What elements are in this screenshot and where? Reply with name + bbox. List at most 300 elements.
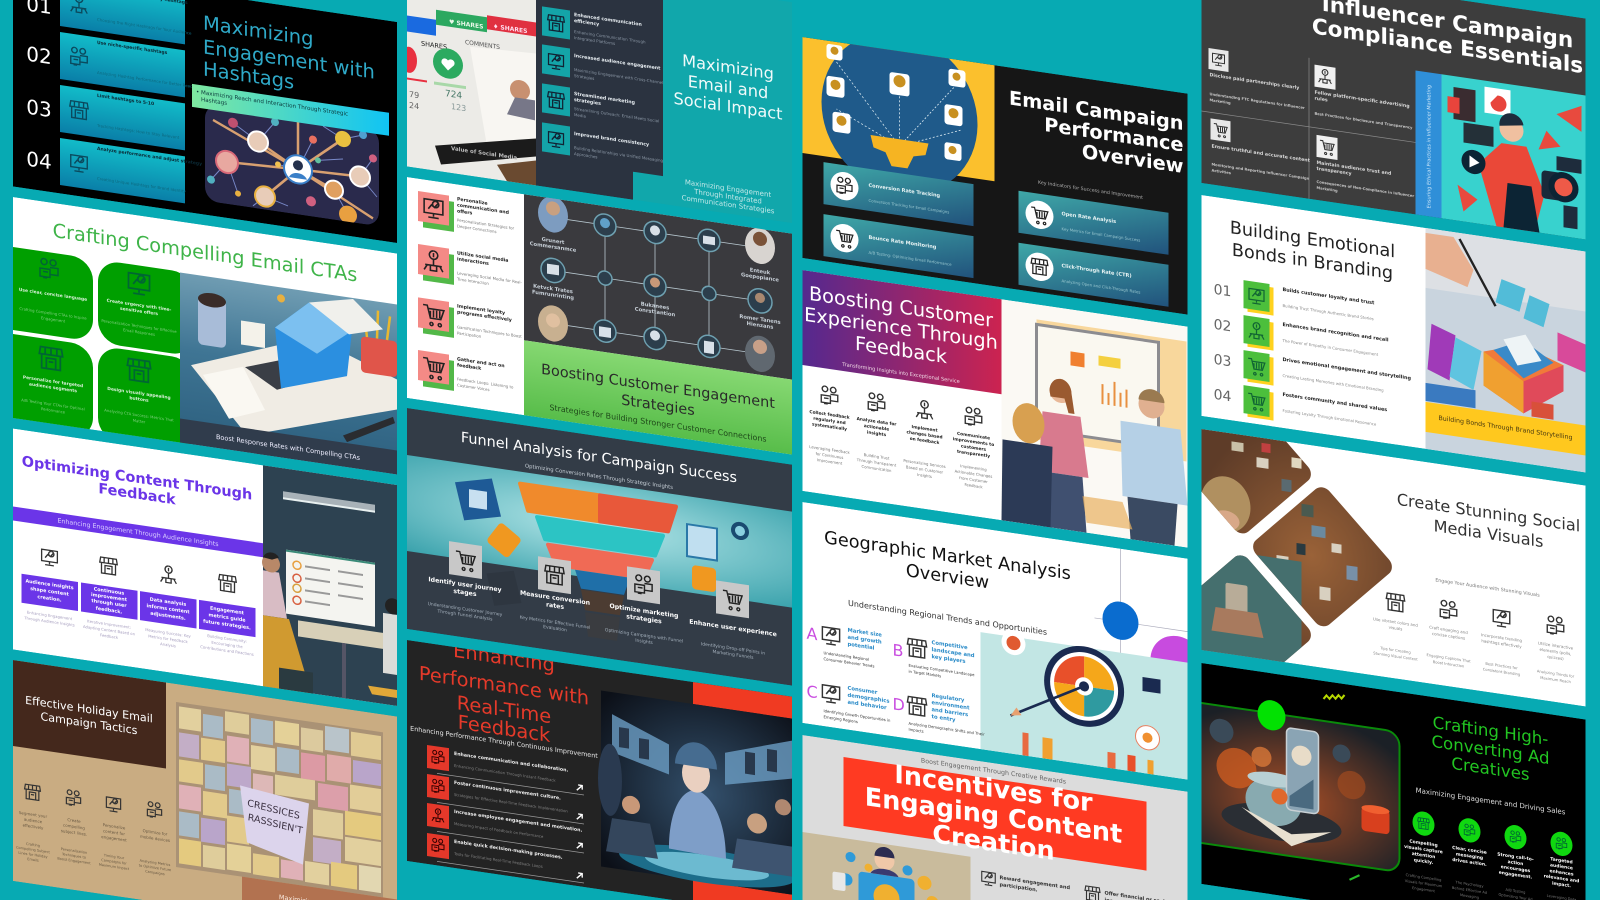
footer caption: Boost Response Rates with Compelling CTAs — [216, 433, 361, 462]
column 2: Adapting Content Based on — [83, 624, 136, 637]
step 01 — [26, 0, 192, 45]
column 1: for Continuous — [816, 451, 843, 460]
creator illustration — [802, 832, 970, 900]
card: buttons — [98, 348, 190, 444]
column 2: compelling — [63, 822, 85, 831]
item reward — [982, 871, 1070, 898]
row 02: Enhances brand recognition and recall — [1282, 322, 1389, 344]
step 03: 03 — [26, 95, 52, 122]
network diagram: Fumrunrinting — [532, 289, 574, 302]
slide: Boosting Customer Engagement Strategies — [407, 175, 792, 455]
red title block: Incentives for — [894, 760, 1093, 819]
item platform: Best Practices for Disclosure and Transparency — [1314, 112, 1413, 130]
column 2: subject lines. — [61, 828, 87, 837]
column 4: Encouraging the — [211, 640, 243, 649]
item platform: Follow platform-specific advertising — [1314, 90, 1410, 110]
slide: Optimizing Content Through Feedback — [13, 428, 401, 707]
footer caption — [242, 877, 397, 900]
item 4: Improved brand consistency — [574, 131, 649, 148]
title block: Effective Holiday Email — [25, 694, 153, 726]
item D: environment — [932, 700, 970, 712]
item 1: Enhance communication and collaboration. — [454, 751, 568, 774]
column 1: Use vibrant colors and — [1373, 616, 1418, 628]
item 1: efficiency — [574, 18, 599, 28]
card: personalize — [13, 334, 93, 430]
step 1: Through Funnel Analysis — [437, 608, 493, 623]
column 2: through user — [91, 598, 127, 609]
item 2: Time Interaction — [456, 276, 489, 286]
item C: demographics — [848, 693, 890, 705]
column 4: Contributions and Reactions — [200, 644, 254, 657]
column 2: actionable — [864, 423, 889, 433]
item 4 — [418, 350, 514, 400]
column 2 — [57, 788, 91, 865]
row 03 — [1214, 346, 1411, 406]
column 3: Metrics for Feedback — [148, 633, 189, 644]
vertical strip — [1416, 70, 1442, 218]
card: bounce: Bounce Rate Monitoring — [868, 235, 937, 251]
column 3: Maximum Impact — [99, 863, 130, 871]
item C: Identifying Growth Opportunities in — [824, 708, 891, 723]
title: Geographic Market Analysis — [824, 527, 1071, 584]
subtitle: Optimizing Conversion Rates Through Strategic Insights — [525, 463, 673, 491]
column 3: informs content — [146, 603, 190, 616]
column 2 — [81, 554, 138, 643]
column 4 — [953, 405, 994, 491]
green caption — [524, 340, 792, 455]
item A: Consumer Behavior Trends — [824, 656, 874, 669]
column 2: improvement — [91, 592, 128, 603]
item 3: Media — [574, 112, 587, 119]
column 4: metrics guide — [208, 612, 246, 624]
column 2: Analyze data for — [857, 416, 897, 428]
network diagram: Commersanmce — [530, 241, 577, 254]
column 2: Clear, concise — [1452, 845, 1487, 856]
card: open rate: Open Rate Analysis — [1062, 211, 1116, 225]
row 01: Builds customer loyalty and trust — [1282, 287, 1375, 306]
item 4: Tools for Facilitating Real-Time Feedback Loops — [453, 851, 543, 869]
column 2 — [1452, 816, 1487, 900]
network diagram: Conrsttantion — [635, 307, 675, 318]
step 2: Key Metrics for Effective Funnel — [520, 615, 590, 631]
sticky notes image: CRESSICES — [247, 798, 300, 822]
column 1: Improvement — [817, 457, 843, 466]
item 2: Maximizing Engagement with Cross-Channel — [574, 67, 663, 85]
item trust: transparency — [1316, 166, 1352, 177]
item 3: programs effectively — [457, 309, 512, 323]
column 3: Implement — [911, 424, 938, 434]
item 1: Deeper Connections — [457, 223, 496, 234]
phone image: 24 — [409, 101, 419, 111]
network diagram: Enteuk — [750, 267, 771, 276]
subtitle: Understanding Regional Trends and Opportunities — [848, 599, 1047, 637]
title: Real-Time — [457, 691, 551, 728]
title: Email and — [688, 72, 768, 103]
column 3: Insights — [917, 472, 932, 479]
item C: C — [806, 682, 818, 702]
column 4: Targeted — [1550, 856, 1573, 866]
column 4: elements (polls, — [1540, 647, 1571, 656]
column 2: Behind Effective Ad — [1452, 886, 1487, 895]
column 3 — [1481, 608, 1523, 677]
title: Converting Ad — [1431, 732, 1550, 768]
funnel — [520, 484, 676, 650]
slide: Funnel Analysis for Campaign Success — [407, 408, 792, 686]
item 3: Participation — [457, 330, 482, 339]
column 4: Campaigns — [145, 869, 165, 876]
slide: Geographic Market Analysis Overview — [802, 502, 1204, 782]
column 3: Personalize — [103, 822, 126, 831]
item 2: Foster continuous improvement culture. — [454, 780, 561, 802]
column 1: visuals — [1389, 625, 1402, 632]
item 3 — [542, 83, 659, 122]
office image — [262, 465, 401, 707]
branding image — [1426, 228, 1586, 472]
green caption: Strategies — [621, 393, 695, 419]
card: personalize: audience segments — [29, 381, 77, 394]
column 3: engagement. — [1499, 870, 1533, 881]
phone image — [401, 0, 536, 185]
column 4: Building Community: — [207, 633, 247, 644]
item trust: Consequences of Non-Compliance in Influencer — [1316, 180, 1414, 198]
slide: Incentives for Engaging Content Creation — [802, 735, 1188, 900]
column 1 — [1404, 809, 1443, 894]
item 1: Enhancing Communication Through — [574, 29, 646, 45]
column 1: audience — [24, 817, 43, 824]
step 1 — [428, 538, 503, 624]
card: CTR: Click-Through Rate (CTR) — [1062, 263, 1132, 279]
item 2: Leveraging Social Media for Real- — [457, 270, 522, 285]
title block — [13, 660, 166, 768]
title: Feedback — [458, 711, 551, 747]
item disclose — [1208, 48, 1305, 116]
diamond photo collage — [1200, 429, 1402, 679]
green circle — [1258, 698, 1286, 732]
column 1: Crafting — [26, 842, 40, 848]
item 1: offers — [457, 208, 473, 217]
item 4: Gather and act on — [457, 356, 505, 369]
phone image: 123 — [451, 102, 466, 113]
title: Compliance Essentials — [1312, 14, 1583, 79]
card: buttons: buttons — [129, 395, 149, 404]
slide: Create Stunning Social Media Visuals — [1200, 429, 1586, 706]
column 3: encourages — [1501, 864, 1530, 874]
subtitle: Maximizing Engagement — [685, 177, 771, 199]
title: Enhancing — [453, 639, 555, 677]
subtitle bar: Enhancing Engagement Through Audience Insights — [57, 518, 219, 548]
column 2: insights — [867, 429, 887, 438]
item B: landscape and — [932, 647, 975, 659]
column 1: systematically — [812, 421, 847, 433]
column 2: Building Trust — [864, 452, 890, 461]
item B: B — [892, 640, 903, 661]
column 2: Craft engaging and — [1429, 624, 1468, 635]
row 01: Building Trust Through Authentic Brand Stories — [1282, 303, 1374, 321]
title: Performance — [1044, 113, 1183, 156]
card: buttons: Analyzing CTA Success: Metrics That — [104, 407, 174, 423]
column 1: Engagement — [1412, 886, 1436, 893]
slide: Building Emotional Bonds in Branding — [1202, 195, 1586, 472]
subtitle bar — [13, 506, 263, 557]
card: urgency: Create urgency with time- — [107, 298, 171, 313]
step 3 — [605, 563, 683, 651]
card: urgency: Email Responses — [123, 327, 155, 337]
sticky notes image: RASSSIEN'T — [247, 812, 303, 837]
column 1 — [16, 783, 50, 865]
phone image: COMMENTS — [465, 39, 500, 51]
item 3: strategies — [574, 97, 601, 107]
column 1: Segment your — [19, 810, 47, 819]
scene image — [1182, 700, 1400, 872]
item offer — [1085, 886, 1170, 900]
item D: to entry — [932, 714, 956, 724]
slide: Crafting High-Converting Ad Creatives — [1182, 660, 1586, 900]
column 3: Timing Your — [103, 853, 125, 860]
column 1: Lines for Holiday — [18, 851, 48, 859]
item disclose: Understanding FTC Regulations for Influencer — [1210, 92, 1305, 110]
title: Building Emotional — [1230, 218, 1395, 262]
column 4 — [1537, 614, 1575, 685]
row 02 — [1214, 311, 1389, 368]
card: clear language: Crafting Compelling CTAs to Inspire — [19, 306, 87, 321]
column 4: Actionable Changes — [955, 468, 992, 479]
column 3: Based on Customer — [906, 464, 944, 475]
item 4: Feedback Loops: Listening to — [457, 376, 514, 390]
step 3: Optimize marketing — [609, 603, 679, 620]
item D: Analyzing Demographic Shifts and Their — [908, 721, 985, 737]
column 3: Strong call-to- — [1497, 852, 1534, 863]
column 1 — [22, 546, 78, 628]
item 3: Streamlining Outreach: Email Meets Social — [574, 106, 659, 124]
column 3: on feedback — [910, 436, 939, 446]
subtitle: Maximizing Engagement and Driving Sales — [1416, 786, 1566, 817]
step 4: Identifying Drop-off Points in — [701, 641, 765, 657]
item 2: Strategies for Effective Real-Time Feedback Implementation — [454, 792, 568, 814]
column 2: Techniques to — [61, 852, 86, 860]
header block: Feedback — [855, 332, 948, 368]
column 4: to Optimize Future — [139, 864, 171, 872]
red accents — [693, 682, 792, 900]
column 1: shape content — [30, 586, 69, 598]
card: open rate — [1018, 191, 1168, 255]
item truthful: Monitoring and Reporting Influencer Campaign — [1212, 162, 1310, 181]
column 1: Leveraging Feedback — [809, 444, 850, 455]
card: clear language: Use clear, concise language — [19, 287, 87, 303]
column 3: Measuring Success: Key — [145, 627, 192, 639]
column 1: effectively — [23, 822, 44, 831]
item C — [806, 680, 891, 729]
item 1: Integrated Platforms — [574, 35, 615, 46]
item D: and barriers — [932, 707, 968, 718]
item 2: interactions — [457, 256, 489, 267]
item 1: communication and — [457, 202, 509, 216]
item disclose: Marketing — [1210, 98, 1231, 105]
step 03: Tracking Hashtags: How to Stay Relevant — [96, 123, 180, 140]
column 2: Feedback — [100, 632, 119, 640]
subtitle ribbon — [192, 84, 389, 136]
column 1: Compelling — [1409, 839, 1438, 849]
card: conversion: Conversion Rate Tracking — [868, 183, 941, 199]
card: urgency — [98, 262, 180, 354]
phone image: ♦ SHARES — [493, 23, 527, 35]
card: urgency: Personalization Techniques for Effective — [101, 318, 177, 334]
item 4 — [542, 122, 663, 163]
title: Hashtags — [203, 58, 294, 94]
column 2: Communication — [862, 464, 892, 473]
item truthful — [1210, 118, 1311, 187]
item 2 — [427, 774, 584, 824]
card: personalize: Personalize for targeted — [23, 374, 83, 389]
card: open rate: Key Metrics for Email Campaign Success — [1062, 226, 1140, 243]
phone image: 724 — [445, 89, 462, 102]
step 4: Marketing Funnels — [712, 649, 754, 661]
title: Maximizing — [682, 51, 774, 83]
title: Crafting High- — [1433, 713, 1548, 749]
item B: in Target Markets — [908, 669, 941, 678]
column 2: Engaging Captions That — [1426, 653, 1471, 664]
row 02: The Power of Empathy in Consumer Engagement — [1282, 338, 1379, 357]
header block: Experience Through — [804, 303, 998, 354]
step 3: strategies — [626, 613, 662, 625]
column 1: regularly and — [813, 416, 846, 426]
item 4: Enable quick decision-making processes. — [454, 839, 563, 861]
network diagram: Grunert — [542, 237, 565, 246]
item 2: Increased audience engagement — [574, 53, 661, 72]
item B: Competitive — [932, 640, 968, 651]
row 01 — [1214, 276, 1375, 331]
step 1: Identify user journey — [428, 576, 502, 594]
step 03 — [26, 80, 185, 150]
item truthful: Ensure truthful and accurate content — [1212, 143, 1311, 164]
step 3: Optimizing Campaigns with Funnel — [605, 627, 683, 645]
item 2 — [418, 244, 522, 295]
column 1: visuals capture — [1404, 844, 1443, 855]
column 2: Messaging — [1460, 893, 1479, 900]
vertical strip: Ensuring Ethical Practices in Influencer Marketing — [1427, 84, 1432, 209]
column 3 — [99, 796, 130, 871]
item trust: Maintain audience trust and — [1316, 160, 1391, 177]
item A: Understanding Regional — [824, 650, 869, 662]
network diagram: Bukanees — [641, 301, 669, 312]
card: clear language: Engagement — [41, 315, 66, 324]
column 1: Through Audience Insights — [23, 615, 75, 628]
column 3: action — [1508, 859, 1523, 867]
row 02: 02 — [1214, 317, 1231, 335]
header block — [802, 270, 1002, 394]
slide: Influencer Campaign Compliance Essentials — [1202, 0, 1586, 239]
step 1: stages — [453, 588, 477, 598]
column 4: Analyzing Metrics — [140, 859, 171, 867]
column 2: Through Transparent — [856, 457, 897, 468]
column 4: from Customer — [959, 475, 988, 484]
item truthful: Activities — [1212, 168, 1232, 175]
step 02: Analyzing Hashtag Performance for Better Reach — [97, 70, 195, 89]
item disclose: Disclose paid partnerships clearly — [1210, 72, 1299, 91]
step 04: Analyze performance and adjust strategy — [97, 146, 202, 167]
column 3: hashtags effectively — [1481, 638, 1522, 649]
squiggle accents — [1324, 692, 1360, 881]
step 2: Evaluation — [543, 624, 567, 634]
step 2: Measure conversion — [520, 590, 590, 607]
slide: Crafting Compelling Email CTAs — [0, 194, 397, 484]
yellow caption — [1426, 402, 1586, 455]
card: personalize: A/B Testing Your CTAs for Optimal — [21, 397, 85, 412]
subtitle: Boost Engagement Through Creative Rewards — [921, 757, 1066, 786]
red title block — [844, 752, 1146, 881]
column 2: Boost Engagement — [57, 857, 91, 865]
item D: D — [892, 694, 905, 715]
column 3: Personalizing Services — [903, 458, 946, 469]
card: clear language — [13, 247, 93, 339]
item B: Evaluating Competitive Landscape — [908, 663, 975, 677]
column 1: Audience insights — [25, 578, 74, 591]
column 2: Iterative Improvement: — [87, 618, 131, 630]
influencer illustration — [1442, 74, 1586, 239]
network image — [205, 104, 379, 228]
item reward: participation. — [999, 882, 1038, 894]
column 4: mobile devices — [140, 834, 170, 843]
title: Creatives — [1451, 754, 1530, 784]
column 1: Compelling Subject — [16, 845, 50, 855]
item 4: Approaches — [574, 151, 598, 160]
step 2 — [520, 554, 590, 637]
column 4: impact. — [1552, 881, 1571, 889]
column 3: Consistent Branding — [1483, 667, 1521, 677]
item 4 — [427, 833, 584, 883]
item C: and behavior — [848, 700, 887, 711]
step 4: Enhance user experience — [689, 619, 777, 638]
column 4 — [199, 571, 256, 657]
item B: key players — [932, 654, 966, 665]
item trust: Marketing — [1316, 186, 1338, 193]
subtitle: Engage Your Audience with Stunning Visuals — [1435, 577, 1540, 599]
title block: Campaign Tactics — [41, 710, 138, 737]
item 4: Building Relationships via Unified Messaging — [574, 145, 664, 163]
row 03: Creating Lasting Memories with Emotional Branding — [1282, 373, 1384, 393]
row 03: 03 — [1214, 352, 1231, 370]
title: Crafting Compelling Email CTAs — [53, 219, 357, 287]
item C: Emerging Regions — [824, 714, 858, 724]
target image — [980, 626, 1188, 780]
title: Funnel Analysis for Campaign Success — [461, 430, 737, 486]
column 2: Boost Interaction — [1433, 660, 1465, 669]
card: CTR — [1018, 243, 1168, 307]
step 04: 04 — [26, 147, 52, 174]
slide: Effective Holiday Email Campaign Tactics — [13, 660, 397, 900]
item 2: Strategies — [574, 73, 594, 81]
column 4: Feedback — [964, 482, 983, 490]
title: Engagement with — [203, 36, 375, 84]
title: Maximizing — [203, 12, 313, 51]
subtitle ribbon: Maximizing Reach and Interaction Through Strategic — [201, 90, 348, 118]
item 2 — [542, 44, 663, 84]
slide: Boosting Customer Experience Through Feedback — [802, 270, 1188, 548]
phone image: SHARES — [421, 40, 447, 51]
header block: Transforming Insights into Exceptional Service — [841, 362, 960, 385]
title: Media Visuals — [1434, 516, 1543, 551]
item platform — [1314, 65, 1413, 130]
subtitle: Enhancing Performance Through Continuous Improvement — [410, 725, 598, 760]
row 01: 01 — [1214, 282, 1231, 300]
column 2 — [1426, 598, 1471, 670]
footer caption — [180, 419, 397, 474]
item C: Consumer — [848, 686, 878, 696]
step 3: Insights — [635, 638, 653, 646]
column 3: A/B Testing — [1506, 888, 1525, 895]
item 1: Personalization Strategies for — [457, 217, 515, 231]
column 4: improvements to — [953, 436, 994, 448]
column 4: quizzes) — [1547, 654, 1564, 661]
